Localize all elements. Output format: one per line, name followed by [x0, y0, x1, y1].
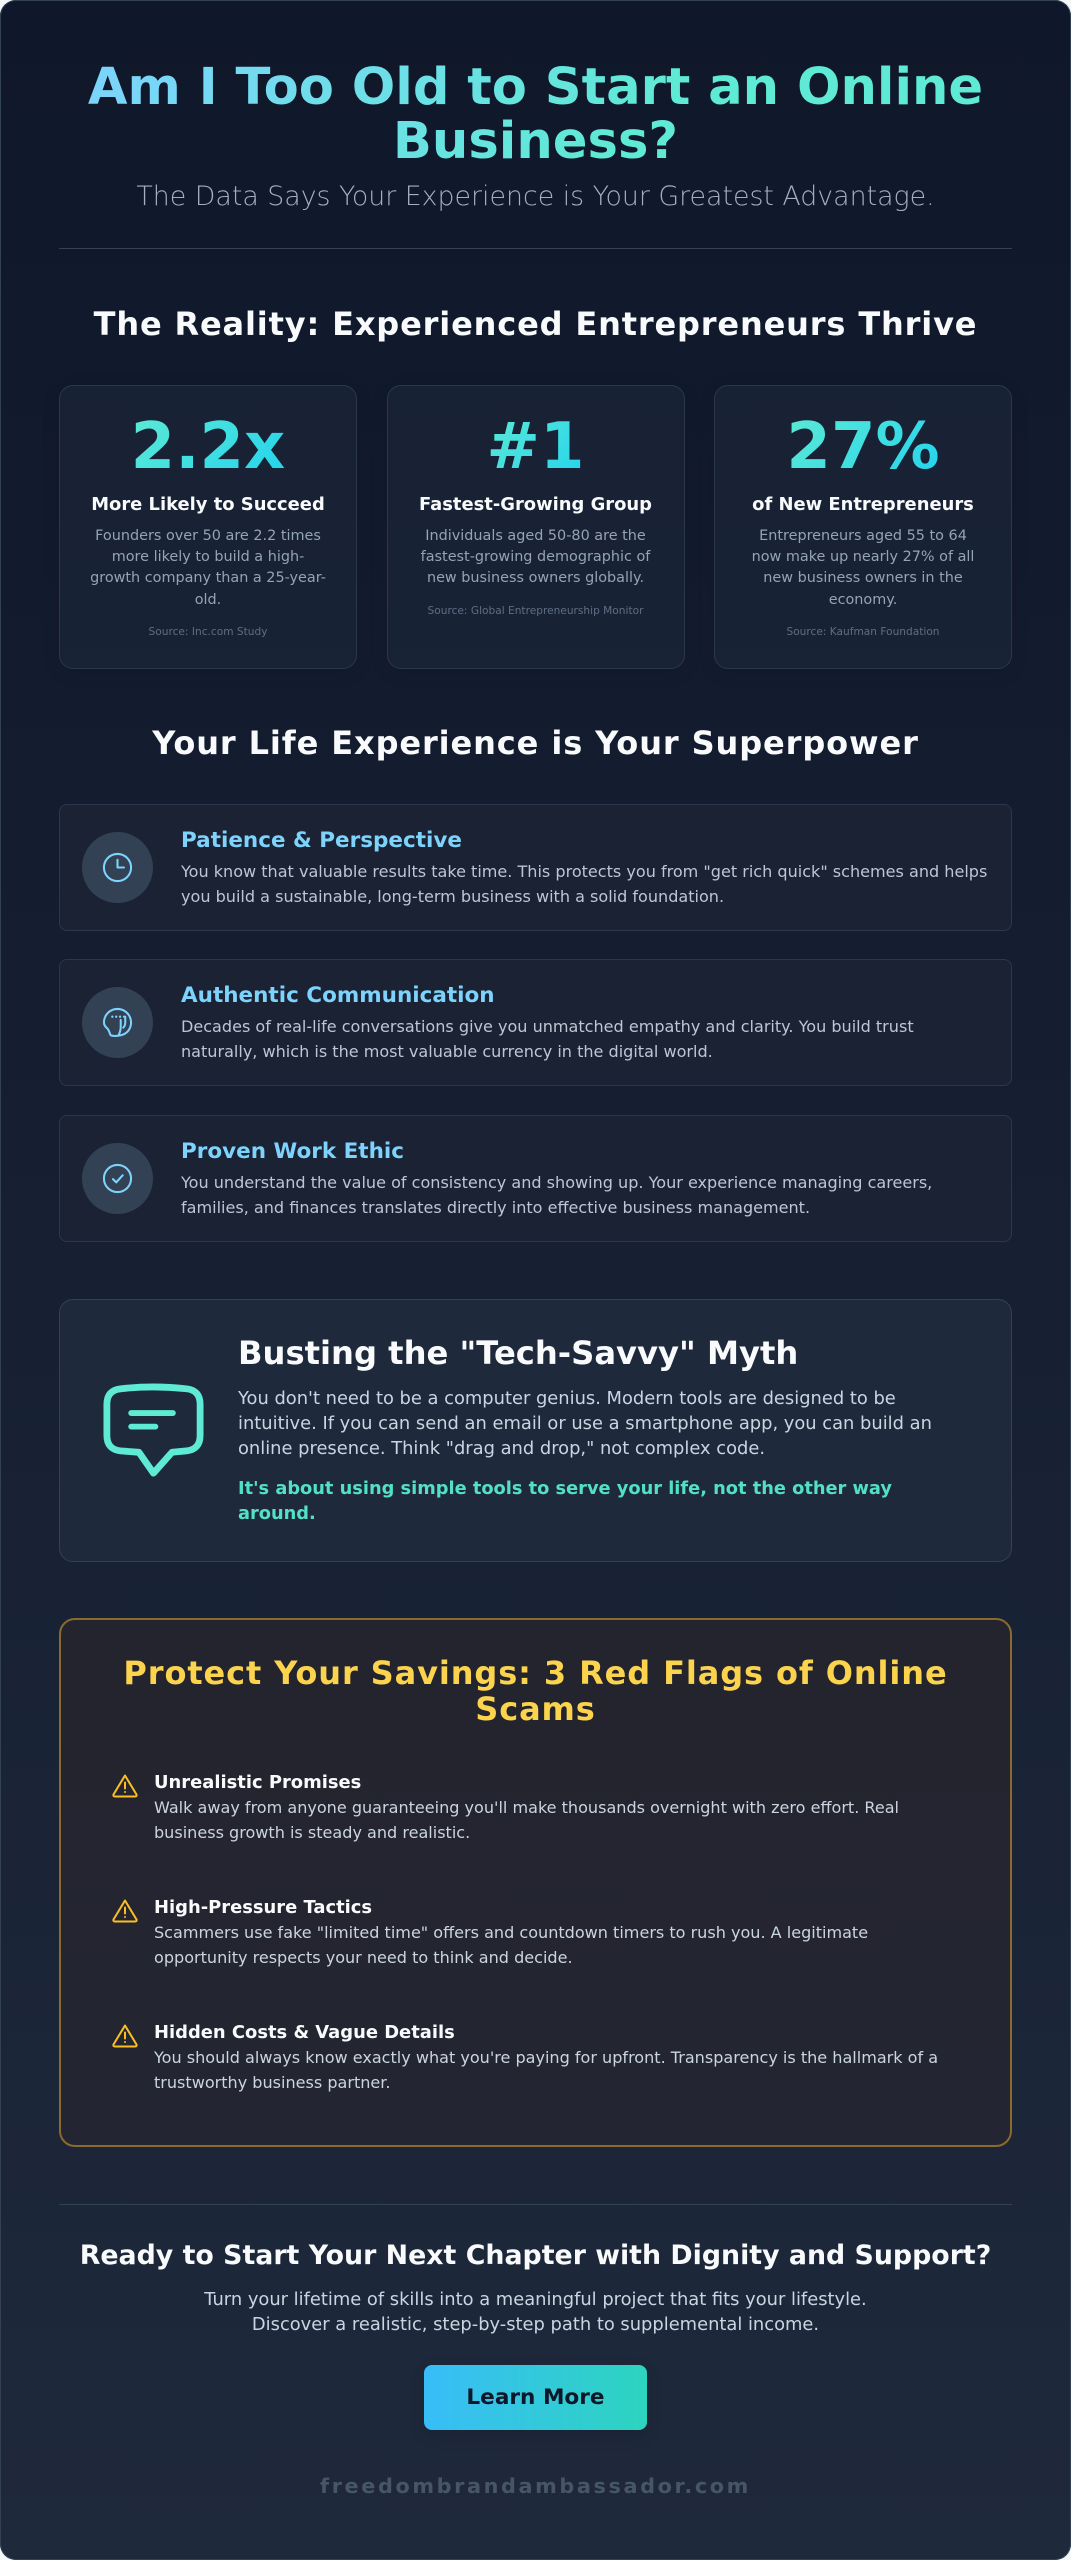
panel: stat 2.2x [59, 385, 357, 669]
stat source: Source: Kaufman Foundation [786, 626, 940, 638]
title: Am I Too Old to Start an Online [88, 57, 983, 117]
panel: red flags [59, 1618, 1012, 2147]
panel: communication [59, 959, 1012, 1086]
red flag: hidden costs [112, 2022, 938, 2092]
heading: superpower: Your Life Experience is Your Superpower [152, 724, 919, 762]
icon: clock [82, 832, 152, 903]
flag text: business growth is steady and realistic. [154, 1823, 470, 1842]
feature description [181, 1016, 914, 1060]
flag text: Walk away from anyone guaranteeing you'll make thousands overnight with zero effort. Real [154, 1798, 899, 1817]
panel: work ethic [59, 1115, 1012, 1242]
flag text [154, 2048, 938, 2092]
feature description: you build a sustainable, long-term business with a solid foundation. [181, 886, 724, 906]
flag text: opportunity respects your need to think and decide. [154, 1948, 573, 1967]
icon: warning [112, 1900, 138, 1922]
flag title: Unrealistic Promises [154, 1772, 361, 1793]
red flags heading: Scams [475, 1690, 596, 1728]
myth body: online presence. Think "drag and drop," not complex code. [238, 1438, 765, 1459]
stat number: 2.2x [131, 410, 285, 484]
panel: stat 27% [714, 385, 1012, 669]
feature description: naturally, which is the most valuable currency in the digital world. [181, 1042, 713, 1060]
flag text: trustworthy business partner. [154, 2073, 391, 2092]
cta text: Discover a realistic, step-by-step path to supplemental income. [252, 2314, 819, 2335]
icon: check circle [82, 1143, 152, 1214]
title [88, 57, 983, 171]
stat description [752, 528, 974, 608]
stat label: More Likely to Succeed [91, 494, 325, 515]
stat description: old. [195, 592, 221, 608]
flag text [154, 1923, 868, 1967]
flag title: High-Pressure Tactics [154, 1897, 372, 1918]
cta button [424, 2365, 647, 2430]
stat description: Founders over 50 are 2.2 times [95, 528, 321, 544]
red flags heading [123, 1654, 948, 1728]
red flag: pressure [112, 1897, 868, 1967]
feature title: Proven Work Ethic [181, 1139, 404, 1164]
footer domain: freedombrandambassador.com [320, 2474, 751, 2498]
icon: speech head [82, 987, 152, 1058]
stat description: fastest-growing demographic of [421, 549, 650, 565]
flag text: Scammers use fake "limited time" offers and countdown timers to rush you. A legitimate [154, 1923, 868, 1942]
myth highlight: It's about using simple tools to serve your life, not the other way [238, 1478, 892, 1498]
myth body: You don't need to be a computer genius. Modern tools are designed to be [238, 1388, 896, 1409]
cta heading: Ready to Start Your Next Chapter with Dignity and Support? [80, 2240, 991, 2271]
icon: chat bubble [104, 1384, 204, 1476]
stat source: Source: Global Entrepreneurship Monitor [428, 604, 643, 616]
stat description: economy. [829, 592, 897, 608]
feature description [181, 862, 987, 906]
cta button: Learn More [466, 2385, 605, 2410]
panel: tech myth [59, 1299, 1012, 1562]
feature description: You understand the value of consistency and showing up. Your experience managing careers, [181, 1172, 932, 1192]
stat number: #1 [486, 410, 585, 484]
feature description: You know that valuable results take time. This protects you from "get rich quick" schemes and helps [181, 862, 987, 880]
stat number: 27% [786, 410, 940, 484]
myth heading: Busting the "Tech-Savvy" Myth [238, 1334, 798, 1372]
myth body: intuitive. If you can send an email or use a smartphone app, you can build an [238, 1413, 932, 1434]
panel: stat #1 [386, 385, 684, 669]
stat description: more likely to build a high- [112, 549, 304, 565]
flag text: You should always know exactly what you're paying for upfront. Transparency is the hallmark of a [154, 2048, 938, 2067]
cta text [204, 2289, 867, 2335]
stat description: growth company than a 25-year- [90, 570, 326, 586]
red flag: promises [112, 1772, 899, 1842]
panel: patience [59, 804, 1012, 931]
icon: warning [112, 2024, 138, 2048]
feature description: families, and finances translates directly into effective business management. [181, 1198, 810, 1216]
title: Business? [393, 111, 678, 171]
stat description [420, 528, 651, 586]
heading: the reality: The Reality: Experienced Entrepreneurs Thrive [94, 304, 977, 342]
cta text: Turn your lifetime of skills into a meaningful project that fits your lifestyle. [204, 2289, 867, 2310]
feature description: Decades of real-life conversations give you unmatched empathy and clarity. You build trust [181, 1016, 914, 1036]
stat description: new business owners in the [763, 570, 963, 586]
feature title: Patience & Perspective [181, 828, 462, 853]
stat description: Entrepreneurs aged 55 to 64 [759, 528, 967, 544]
stat description: now make up nearly 27% of all [752, 549, 974, 565]
red flags heading: Protect Your Savings: 3 Red Flags of Online [123, 1654, 948, 1692]
myth body [238, 1388, 932, 1459]
myth highlight: around. [238, 1502, 316, 1524]
icon: warning [112, 1774, 138, 1798]
stat label: of New Entrepreneurs [752, 494, 974, 515]
subtitle: The Data Says Your Experience is Your Greatest Advantage. [136, 181, 935, 212]
flag title: Hidden Costs & Vague Details [154, 2022, 455, 2043]
stat source: Source: Inc.com Study [149, 626, 267, 638]
stat label: Fastest-Growing Group [419, 494, 652, 515]
stat description: Individuals aged 50-80 are the [425, 528, 646, 544]
feature title: Authentic Communication [181, 983, 495, 1008]
myth highlight [238, 1478, 892, 1524]
stat description: new business owners globally. [427, 570, 644, 586]
flag text [154, 1798, 899, 1842]
feature description [181, 1172, 932, 1216]
stat description [90, 528, 326, 608]
